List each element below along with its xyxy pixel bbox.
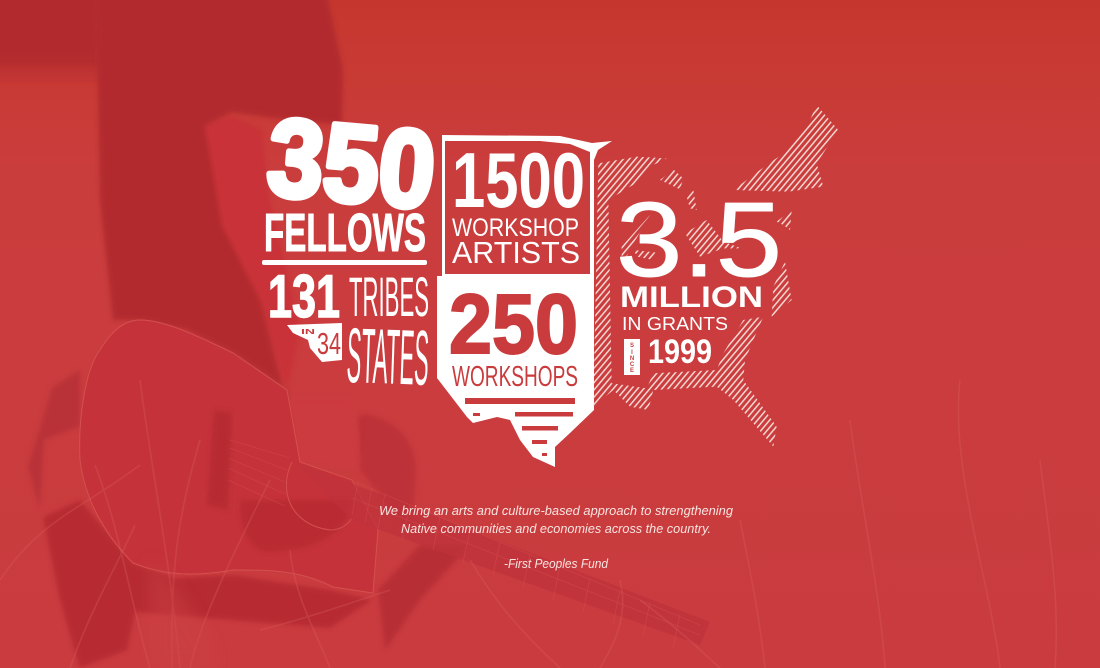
state badge: in 34: 34: [317, 326, 341, 361]
hatched map: [593, 105, 838, 447]
since tag: [624, 339, 640, 375]
number: 350: 350: [263, 95, 440, 232]
figure: dark torso and leg: [96, 0, 378, 468]
since tag: S: [630, 343, 634, 349]
panel: hatched US map with grants: [593, 105, 838, 447]
grass blades: [0, 380, 1056, 668]
number: 250: 250: [449, 277, 578, 371]
panel: workshops shield: [437, 135, 612, 467]
state badge: in 34: [287, 323, 342, 362]
label: WORKSHOPS: WORKSHOPS: [452, 361, 578, 393]
label: IN GRANTS: IN GRANTS: [622, 314, 728, 334]
guitar strap and dark lower leg: [28, 370, 470, 668]
label: MILLION: MILLION: [620, 281, 763, 314]
label: WORKSHOP: WORKSHOP: [452, 214, 579, 242]
label: FELLOWS: FELLOWS: [264, 203, 426, 263]
number: 1500: 1500: [452, 136, 585, 224]
since tag: E: [630, 368, 634, 374]
guitar bridge: [207, 410, 232, 510]
infographic canvas: TRIBES: [349, 265, 429, 328]
mission statement: Native communities and economies across the country.: [401, 521, 711, 536]
guitar neck with frets: [228, 440, 710, 648]
stripes at the tip of the shield: [465, 398, 575, 456]
guitar body: [80, 320, 378, 593]
shield shape: [437, 135, 612, 467]
number: 131: 131: [268, 263, 340, 330]
number: 1999: 1999: [648, 333, 712, 371]
state badge: in 34: IN: [301, 329, 315, 336]
since tag: C: [630, 362, 635, 368]
label: ARTISTS: ARTISTS: [452, 235, 580, 270]
infographic canvas: STATES: [345, 311, 430, 402]
divider line: [262, 260, 427, 265]
mission statement: We bring an arts and culture-based approach to strengthening: [379, 503, 734, 518]
number: 3.5: 3.5: [616, 181, 782, 299]
since tag: I: [631, 350, 633, 356]
panel: fellows statistics: [262, 95, 440, 402]
since tag: N: [630, 356, 634, 362]
mission statement: [379, 503, 734, 571]
mission statement: -First Peoples Fund: [504, 556, 609, 571]
